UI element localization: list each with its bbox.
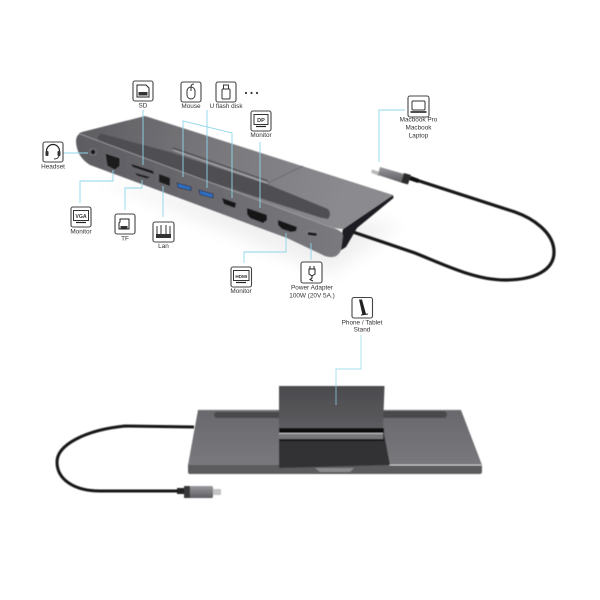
line: laptop bbox=[379, 110, 405, 162]
dock top surface bbox=[79, 116, 393, 229]
icon: phone stand bbox=[342, 298, 383, 334]
hinge bar bbox=[279, 433, 383, 439]
front highlight bbox=[80, 134, 333, 228]
USB-C connector: bottom dock bbox=[177, 486, 221, 498]
front notch bbox=[315, 468, 354, 472]
label: HDMI monitor: Monitor bbox=[230, 288, 253, 295]
cable: bottom dock bbox=[57, 426, 194, 491]
icon: Lan router bbox=[153, 222, 174, 250]
line: headset bbox=[63, 152, 88, 154]
port: USB 3 blue 2 bbox=[199, 190, 213, 198]
line: Lan bbox=[162, 186, 164, 217]
icon: TF bbox=[115, 214, 135, 242]
callout lines bbox=[63, 110, 405, 405]
label: Lan: Lan bbox=[158, 243, 169, 250]
port: VGA bbox=[105, 153, 120, 170]
icon: power plug: 100W (20V 5A.) bbox=[289, 292, 335, 300]
base top plate bbox=[188, 410, 482, 465]
dark strip top bbox=[98, 134, 330, 219]
cable: top dock bbox=[350, 178, 554, 280]
line: USB mouse bbox=[183, 121, 232, 198]
icon: DP monitor bbox=[250, 111, 273, 139]
port: USB-C bbox=[307, 231, 318, 237]
port: USB 3 blue 1 bbox=[177, 183, 191, 190]
more dots bbox=[245, 92, 258, 94]
shadow under top dock bbox=[90, 175, 400, 275]
dock right side bbox=[338, 195, 394, 252]
base front edge bbox=[188, 464, 482, 474]
label: phone stand: Phone / Tablet bbox=[342, 320, 383, 326]
stand bbox=[279, 386, 384, 428]
label: DP monitor: Monitor bbox=[250, 132, 273, 139]
recess shadow bbox=[279, 428, 384, 434]
line: HDMI bbox=[244, 233, 286, 263]
icon: VGA monitor: VGA bbox=[75, 214, 87, 220]
label: laptop: Macbook Pro bbox=[400, 117, 438, 124]
icon: mouse bbox=[181, 82, 201, 110]
USB-C connector: top dock bbox=[371, 167, 419, 184]
line: power bbox=[310, 243, 312, 260]
icon: SD bbox=[133, 81, 153, 110]
right strip bbox=[383, 411, 447, 418]
label: power adapter: Power Adapter bbox=[291, 284, 334, 292]
port: DisplayPort bbox=[247, 208, 267, 223]
icon: laptop: Macbook bbox=[406, 124, 432, 132]
icon: VGA monitor bbox=[70, 207, 93, 236]
port: SD bbox=[131, 164, 154, 174]
port: HDMI bbox=[278, 220, 297, 232]
line: stand bbox=[336, 335, 361, 405]
base highlight bbox=[389, 464, 482, 466]
stand panel edge bbox=[268, 166, 303, 183]
icon: DP monitor: DP bbox=[257, 118, 265, 124]
bottom dock with stand bbox=[57, 386, 482, 498]
icon: power plug bbox=[289, 262, 335, 300]
line: TF bbox=[125, 180, 142, 210]
port: audio jack bbox=[90, 149, 96, 155]
label: headset: Headset bbox=[41, 164, 65, 170]
icon: laptop bbox=[400, 96, 438, 140]
icon: U flash disk bbox=[209, 82, 243, 110]
top dock with cable bbox=[76, 116, 554, 280]
icon: HDMI monitor bbox=[230, 267, 253, 295]
port: RJ45 bbox=[159, 174, 170, 186]
line: DP bbox=[259, 142, 261, 208]
label: VGA monitor: Monitor bbox=[70, 228, 93, 236]
icon: HDMI monitor: HDMI bbox=[235, 274, 247, 279]
ports bbox=[90, 149, 318, 237]
icon: laptop: Laptop bbox=[409, 132, 429, 140]
line: USB flash bbox=[206, 110, 208, 188]
label: mouse: Mouse bbox=[181, 103, 201, 110]
stand slot bbox=[173, 148, 268, 181]
label: TF: TF bbox=[121, 236, 129, 242]
line: VGA bbox=[80, 170, 113, 203]
port: USB black bbox=[222, 198, 236, 208]
dock front face bbox=[76, 134, 343, 257]
dark recess bbox=[279, 428, 390, 468]
icon: phone stand: Stand bbox=[354, 326, 371, 334]
label: SD: SD bbox=[139, 102, 148, 110]
left strip bbox=[214, 412, 280, 418]
line: SD bbox=[142, 110, 144, 165]
label: U flash disk: U flash disk bbox=[209, 103, 243, 110]
icon: headset bbox=[41, 142, 65, 170]
port: TF bbox=[135, 173, 150, 178]
